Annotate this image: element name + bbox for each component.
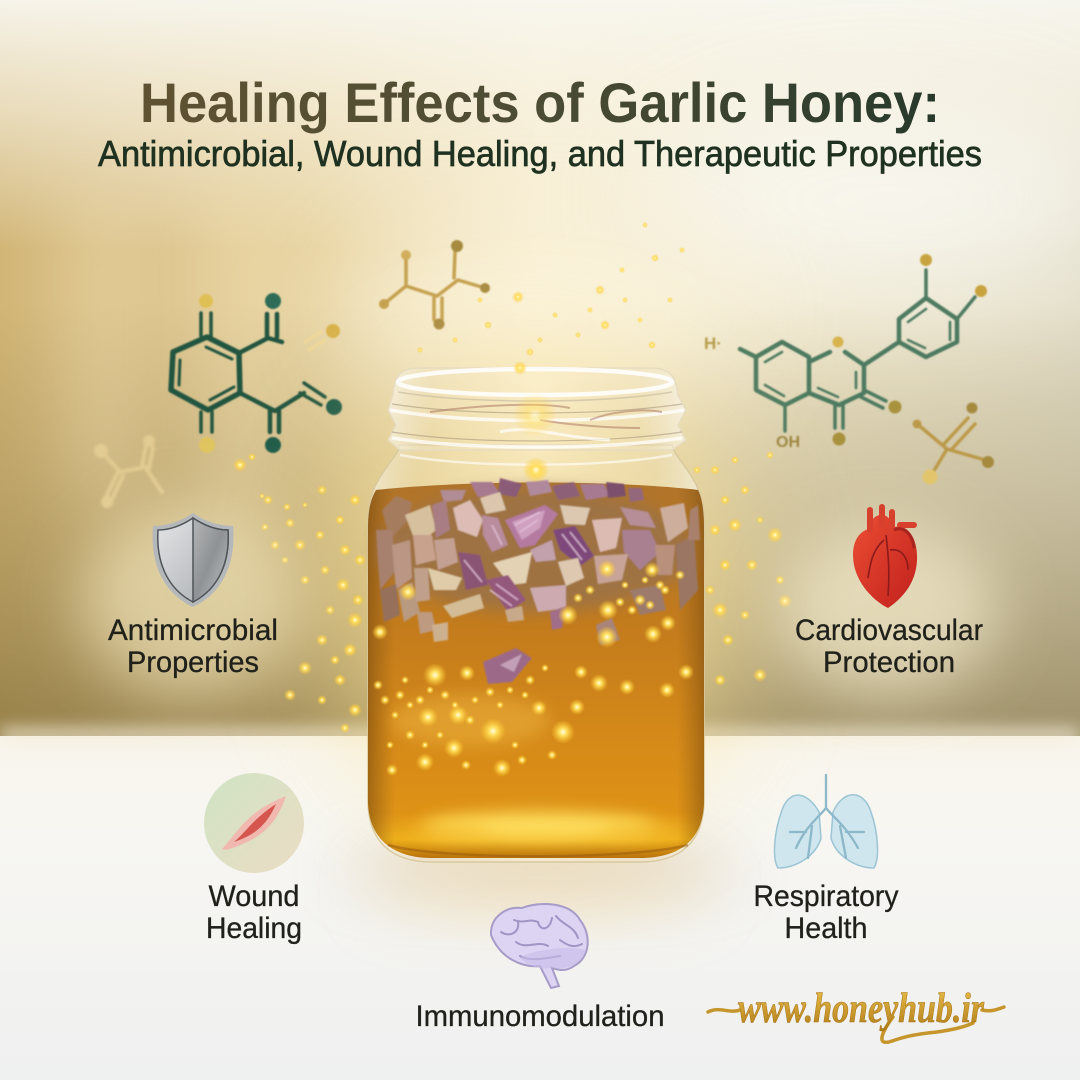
website logo: www.honeyhub.ir [738,986,985,1032]
honey jar [368,368,704,862]
icon: shield [153,513,233,607]
website logo [708,986,1004,1042]
right trail [693,466,701,474]
jar neck and rim [388,368,686,465]
top trail [512,291,524,303]
molecule: small gold top [379,240,490,330]
label: respiratory health: Health [784,912,868,945]
heading: Healing Effects of Garlic Honey: [140,71,940,134]
icon: lungs [775,775,878,868]
molecule: small gold left [94,435,162,508]
panel: antimicrobial properties [80,505,300,695]
molecule: large green left [171,293,342,453]
label: antimicrobial properties: Antimicrobial [108,614,278,647]
subheading: Antimicrobial, Wound Healing, and Therapeutic Properties [98,133,982,174]
title block [98,71,982,174]
jar glass body [368,445,704,862]
honey [368,482,704,858]
golden sparkles [233,222,792,777]
garlic pieces [376,478,700,684]
icon: brain [491,904,588,988]
panel: wound healing [204,773,304,945]
label: immunomodulation: Immunomodulation [416,1000,664,1033]
panel: immunomodulation [416,904,664,1033]
label: respiratory health: Respiratory [754,880,898,913]
jar glow [331,360,741,918]
panel: respiratory health [754,775,898,945]
left trail [233,458,247,472]
icon: heart [853,507,917,608]
molecule: large green right [704,254,987,451]
label: cardiovascular protection: Protection [823,646,955,679]
label: wound healing: Healing [206,912,302,945]
icon: wound [204,773,304,873]
label: cardiovascular protection: Cardiovascular [795,614,983,647]
molecule: small gold right [912,402,994,484]
label: antimicrobial properties: Properties [127,646,259,679]
molecule: large green right: OH [776,434,800,451]
molecule: large green right: H· [704,334,722,353]
label: wound healing: Wound [208,880,300,913]
panel: cardiovascular protection [778,507,998,695]
